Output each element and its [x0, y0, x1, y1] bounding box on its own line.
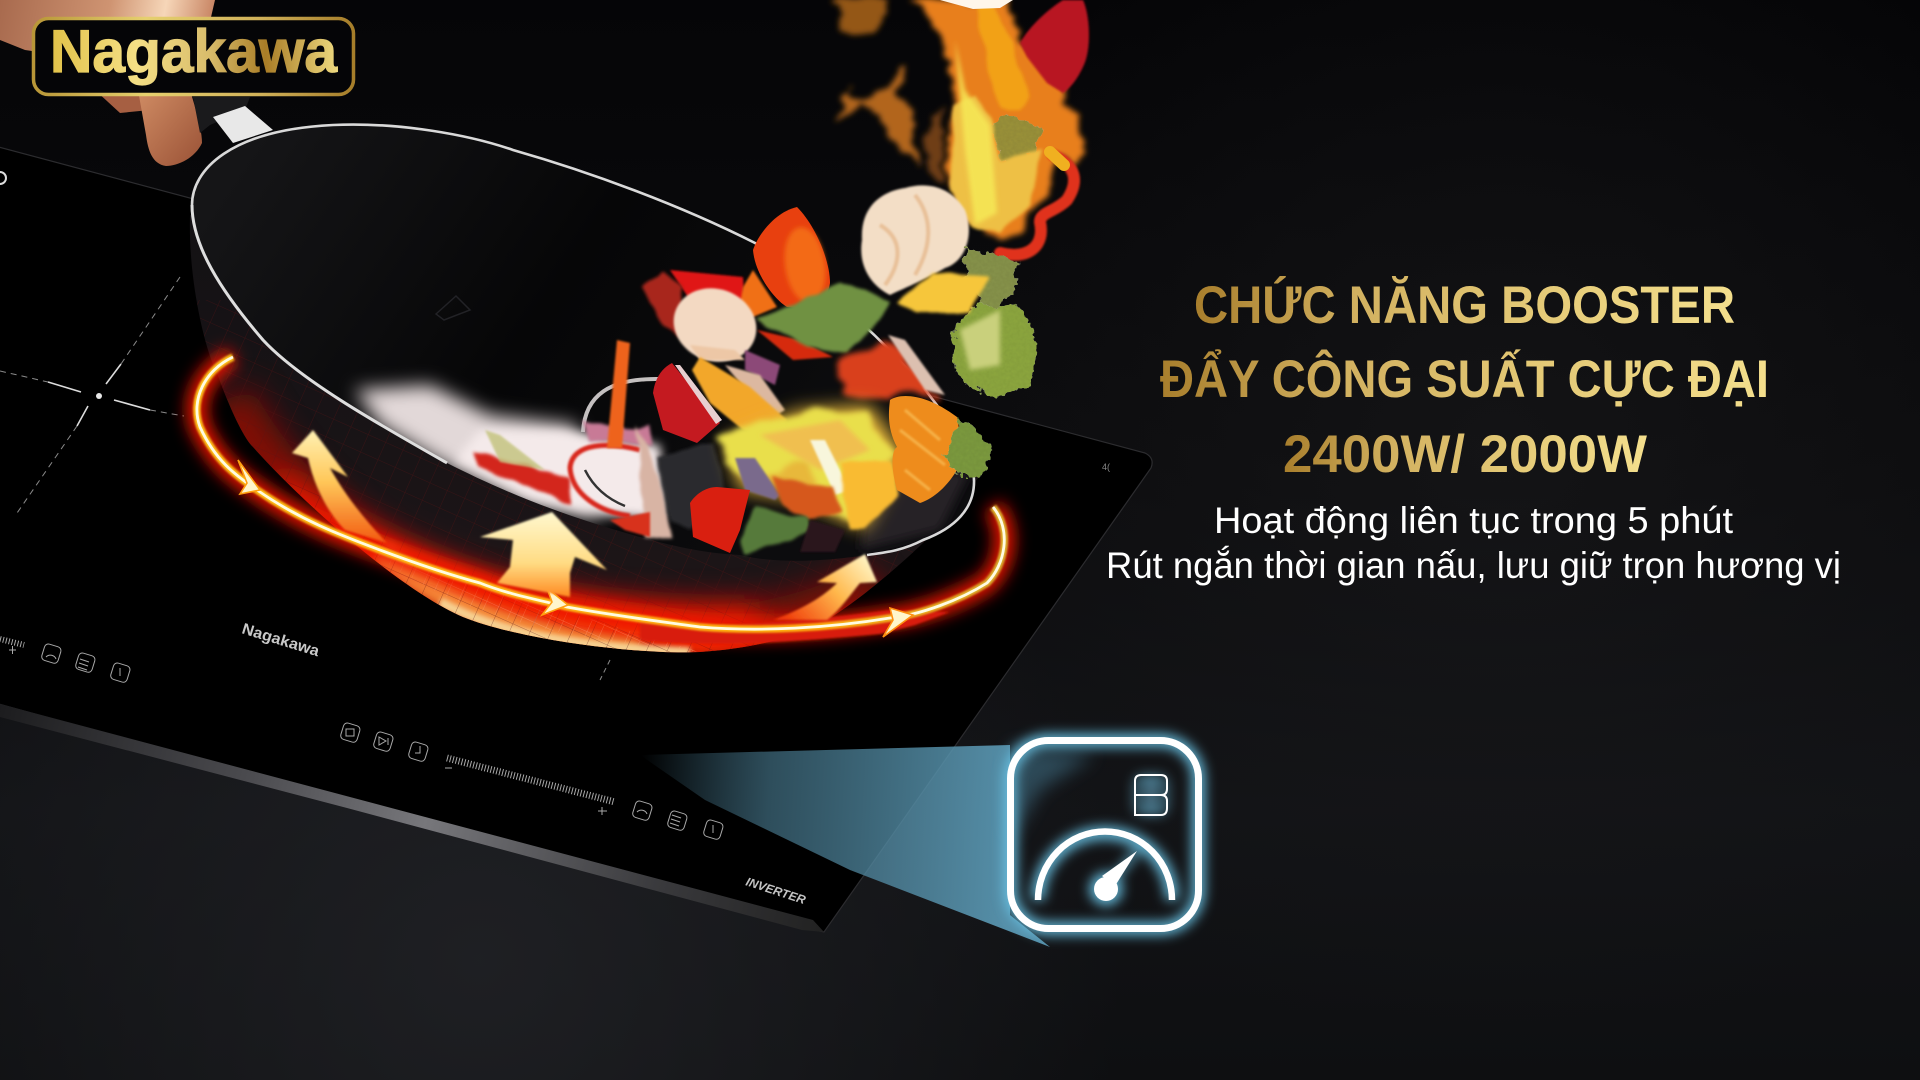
logo wordmark: Nagakawa — [50, 18, 338, 85]
dark bits — [800, 520, 845, 552]
red tomato bottom — [690, 487, 750, 553]
central flames — [717, 410, 893, 527]
heat arrow left — [292, 430, 387, 543]
shrimp stripes — [880, 195, 928, 285]
red pepper middle — [840, 340, 940, 400]
pan heat glow — [190, 300, 990, 660]
front touch controls — [340, 722, 724, 840]
lettuce — [943, 417, 993, 477]
gauge needle — [1102, 851, 1137, 886]
pan rim — [192, 125, 974, 555]
gauge arc — [1038, 831, 1172, 900]
inverter mark: INVERTER — [744, 875, 808, 907]
pan — [190, 97, 990, 660]
purple onion — [745, 350, 780, 385]
pan handle collar — [193, 97, 250, 133]
red lower streak — [640, 610, 950, 644]
cooktop glass surface — [0, 146, 1152, 932]
right corner mark: 4( — [1102, 462, 1110, 472]
red pepper back — [670, 270, 745, 305]
ring glow — [197, 357, 1004, 629]
hand knuckle — [95, 90, 150, 113]
dark leaf — [657, 443, 725, 530]
icon inner shade — [1011, 745, 1095, 840]
strips of pepper — [473, 450, 570, 503]
pepper shadow line — [585, 470, 625, 506]
yellow flame wedge — [900, 273, 987, 313]
heading — [1160, 275, 1769, 484]
red tomato at top — [1020, 0, 1089, 93]
icon frame — [1010, 740, 1198, 928]
yellow flame column — [950, 97, 1040, 233]
pan warning mark — [436, 296, 470, 320]
shrimp tail — [643, 270, 683, 337]
heating ring with arrows — [197, 357, 1004, 644]
side flame wisps — [830, 0, 945, 185]
broccoli highlight — [960, 310, 1000, 370]
pepper curl — [570, 445, 640, 516]
orange stick — [977, 3, 1030, 110]
ring gold — [197, 357, 1004, 629]
letter B mark — [1135, 775, 1167, 815]
orange wedge — [738, 270, 777, 317]
red pepper lower — [610, 512, 650, 537]
description line 1: Hoạt động liên tục trong 5 phút — [1214, 500, 1734, 541]
red pepper curl — [1000, 155, 1074, 255]
pan interior — [192, 125, 974, 561]
red fruit — [653, 363, 720, 443]
heading line 2: ĐẨY CÔNG SUẤT CỰC ĐẠI — [1160, 348, 1769, 409]
broccoli floret — [952, 300, 1040, 397]
orange segment lines — [900, 410, 945, 490]
fruit white slice — [675, 365, 722, 424]
cooking zone markings — [0, 172, 610, 680]
main orange flame — [913, 0, 1083, 240]
onion ring — [583, 379, 660, 432]
food inside the pan — [473, 185, 1040, 553]
red under leaf — [757, 330, 833, 360]
pale onion strand — [637, 423, 672, 540]
flames and vegetables rising above the pan — [830, 0, 1089, 255]
onion slice — [888, 335, 945, 395]
ring arrowhead left — [238, 460, 260, 494]
pale vegetable — [485, 430, 545, 470]
central flame glow — [725, 405, 905, 530]
pan interior highlight — [355, 385, 970, 550]
white piece top — [940, 0, 1013, 9]
orange slice — [692, 357, 787, 437]
cooktop brand name: Nagakawa — [240, 621, 322, 660]
hand finger — [138, 90, 202, 166]
left touch controls — [0, 639, 131, 683]
small shrimp — [663, 277, 767, 373]
heading line 1: CHỨC NĂNG BOOSTER — [1194, 275, 1735, 335]
ring arrowhead middle — [542, 588, 568, 615]
heat arrow center — [480, 512, 607, 597]
cooktop front edge — [0, 704, 824, 932]
pan outer body — [190, 215, 985, 652]
yellow fruit — [840, 460, 897, 530]
ring arrowhead right — [883, 608, 913, 637]
big shrimp — [861, 185, 969, 295]
pink onion — [580, 420, 650, 445]
green leaf — [757, 282, 893, 353]
shrimp strand — [725, 365, 785, 420]
icon: booster gauge — [1010, 740, 1198, 928]
hand palm — [0, 0, 215, 55]
ring core — [197, 357, 1004, 629]
salad greens — [740, 507, 813, 553]
logo — [34, 18, 354, 94]
gauge hub — [1094, 877, 1118, 901]
description text — [1106, 500, 1841, 586]
tomato flesh — [780, 225, 830, 305]
big tomato — [753, 207, 830, 310]
broccoli top — [965, 247, 1018, 310]
pan handle — [213, 106, 273, 143]
light beam to icon — [640, 740, 1060, 950]
heading line 3: 2400W/ 2000W — [1283, 425, 1647, 484]
purple flesh — [735, 458, 780, 500]
icon glow — [1010, 740, 1198, 928]
heat arrow right — [773, 554, 877, 620]
orange segment — [889, 396, 960, 503]
description line 2: Rút ngắn thời gian nấu, lưu giữ trọn hương vị — [1106, 545, 1841, 586]
hand holding the pan — [0, 0, 215, 166]
broccoli top — [988, 113, 1043, 167]
carrot strip — [607, 340, 630, 448]
pan rim left — [192, 205, 447, 463]
orange flesh — [773, 477, 840, 520]
